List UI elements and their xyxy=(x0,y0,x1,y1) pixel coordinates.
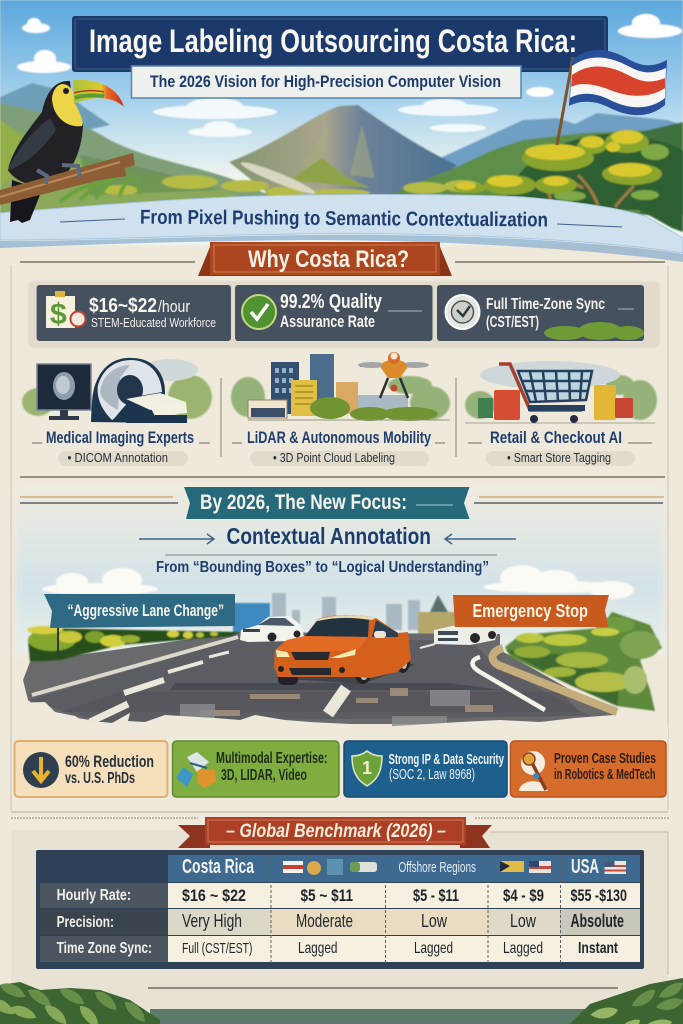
benefit card: case studies xyxy=(510,741,666,797)
pillar: retail: Retail & Checkout AI xyxy=(490,428,622,447)
row: time zone sync: Lagged xyxy=(503,940,543,957)
illustration: medical imaging xyxy=(22,358,212,423)
regional flags xyxy=(283,859,377,875)
toucan on branch xyxy=(0,80,135,223)
row: hourly rate: $5 ~ $11 xyxy=(300,886,353,905)
ribbon text: From Pixel Pushing to Semantic Contextualization xyxy=(140,207,548,231)
right curb and line xyxy=(493,648,617,712)
row: time zone sync: Lagged xyxy=(298,940,338,957)
row: precision xyxy=(40,909,640,935)
icon: clock xyxy=(446,295,480,329)
pillar: medical xyxy=(32,428,210,466)
icon: shield xyxy=(352,751,382,786)
row: time zone sync xyxy=(40,936,640,962)
row: hourly rate: $16 ~ $22 xyxy=(182,886,246,905)
benefit card: multimodal: 3D, LIDAR, Video xyxy=(221,767,307,784)
illustration: city and drone xyxy=(231,352,450,421)
stats band backing xyxy=(28,281,660,348)
divider xyxy=(221,378,456,457)
icon: drone xyxy=(358,352,429,398)
header scene: sky, volcano, hills xyxy=(0,0,683,245)
illustration: shopping cart xyxy=(465,361,657,423)
stat card: quality xyxy=(235,285,432,341)
section lines xyxy=(20,496,664,498)
palm fronds xyxy=(60,172,140,202)
row: time zone sync: Instant xyxy=(578,940,619,957)
pill: • Smart Store Tagging xyxy=(507,450,611,465)
flags xyxy=(500,861,551,873)
row: time zone sync: Full (CST/EST) xyxy=(182,940,253,957)
icon: shield: 1 xyxy=(362,758,372,778)
pillar: lidar xyxy=(232,428,445,466)
benefit card: security xyxy=(344,741,507,797)
white car left xyxy=(240,616,304,642)
row: precision: Low xyxy=(510,911,537,931)
stat card: quality: Assurance Rate xyxy=(280,312,375,331)
benchmark table xyxy=(36,850,644,969)
row: hourly rate: $55 -$130 xyxy=(570,886,627,905)
stat card: price: /hour xyxy=(158,297,190,316)
right road label xyxy=(453,595,609,627)
row: precision: Moderate xyxy=(296,911,353,931)
subtitle box: The 2026 Vision for High-Precision Computer Vision xyxy=(150,72,501,91)
icon: check badge xyxy=(242,295,276,329)
row: precision: Absolute xyxy=(570,911,624,931)
right foliage xyxy=(454,130,683,232)
footer band xyxy=(150,1009,590,1024)
torn paper edge xyxy=(14,702,668,740)
heading ribbon: Global Benchmark xyxy=(178,817,492,848)
footer foliage right xyxy=(570,978,683,1024)
stat card: price: $16~$22 xyxy=(89,295,157,317)
benefit card: multimodal: Multimodal Expertise: xyxy=(216,750,328,767)
stat card: price: STEM-Educated Workforce xyxy=(91,315,216,330)
road scene xyxy=(14,565,668,740)
pill: • 3D Point Cloud Labeling xyxy=(273,450,395,465)
branch xyxy=(0,153,135,205)
right road label: Emergency Stop xyxy=(472,601,588,621)
left bushes xyxy=(27,626,240,662)
pillar: lidar: LiDAR & Autonomous Mobility xyxy=(247,428,431,447)
icon: monitor xyxy=(37,364,91,420)
benefit card: cost xyxy=(14,741,168,797)
subheading: From “Bounding Boxes” to “Logical Understanding” xyxy=(156,559,489,576)
pillar: retail xyxy=(468,428,652,466)
row: hourly rate xyxy=(40,883,640,908)
pill: • DICOM Annotation xyxy=(68,450,168,465)
table header: Costa Rica xyxy=(182,856,255,878)
icon: dollar note xyxy=(46,291,86,331)
clouds and skyline xyxy=(42,565,634,634)
row: hourly rate: Hourly Rate: xyxy=(57,887,131,904)
heading ribbon: Global Benchmark: – Global Benchmark (2026) – xyxy=(226,821,446,842)
blue ribbon xyxy=(0,195,683,262)
teal banner: By 2026, The New Focus: xyxy=(200,491,407,514)
subtitle box xyxy=(132,66,521,98)
benefit card: security: (SOC 2, Law 8968) xyxy=(389,766,475,783)
heading ribbon: Why Costa Rica xyxy=(198,242,452,276)
arrow: left xyxy=(139,534,214,544)
left road label xyxy=(44,594,235,628)
icon: dollar note: $ xyxy=(50,298,67,331)
icon: cart xyxy=(499,364,592,423)
lower panel backing xyxy=(11,830,668,1010)
icon: down arrow xyxy=(23,752,59,788)
footer rule xyxy=(148,987,618,989)
row: hourly rate: $4 - $9 xyxy=(503,886,544,905)
row: precision: Precision: xyxy=(57,914,114,931)
heading ribbon: Why Costa Rica: Why Costa Rica? xyxy=(248,246,409,273)
row: hourly rate: $5 - $11 xyxy=(413,886,459,905)
row: precision: Low xyxy=(421,911,448,931)
pillar: medical: Medical Imaging Experts xyxy=(46,428,194,447)
heading: contextual annotation: Contextual Annotation xyxy=(226,523,431,549)
white car right xyxy=(434,625,497,645)
icon: MRI scanner xyxy=(91,358,187,423)
row: time zone sync: Time Zone Sync: xyxy=(57,940,152,957)
orange car xyxy=(274,615,415,685)
benefit card: multimodal xyxy=(172,741,339,797)
arrow: right xyxy=(445,534,516,544)
section rules xyxy=(11,811,668,813)
flag: USA xyxy=(604,861,626,874)
footer foliage left xyxy=(0,980,160,1024)
benefit card: cost: vs. U.S. PhDs xyxy=(65,770,135,787)
road scene background haze xyxy=(16,484,664,654)
stat card: price xyxy=(37,285,231,341)
left road label: “Aggressive Lane Change” xyxy=(68,601,224,620)
section rule xyxy=(20,476,665,478)
teal banner xyxy=(184,487,470,519)
table header: Offshore Regions xyxy=(398,859,476,876)
row: precision: Very High xyxy=(182,911,242,931)
right bushes xyxy=(505,612,662,711)
benefit card: cost: 60% Reduction xyxy=(65,752,154,771)
foliage xyxy=(544,322,644,340)
stat card: time zone: Full Time-Zone Sync xyxy=(486,296,605,313)
page frame xyxy=(11,265,668,810)
section lines xyxy=(20,261,665,263)
left sign post xyxy=(57,628,59,655)
benefit card: security: Strong IP & Data Security xyxy=(388,751,504,768)
icon: cubes xyxy=(176,752,216,788)
table header: USA xyxy=(571,856,599,878)
title banner xyxy=(72,16,608,72)
table header xyxy=(40,855,640,882)
row: time zone sync: Lagged xyxy=(414,940,453,957)
stat card: quality: 99.2% Quality xyxy=(280,291,383,313)
stat card: time zone: (CST/EST) xyxy=(486,314,539,331)
road xyxy=(14,632,668,740)
stat card: time zone xyxy=(437,285,644,341)
Costa Rica flag xyxy=(557,50,667,145)
icon: robot with magnifier xyxy=(519,751,548,791)
